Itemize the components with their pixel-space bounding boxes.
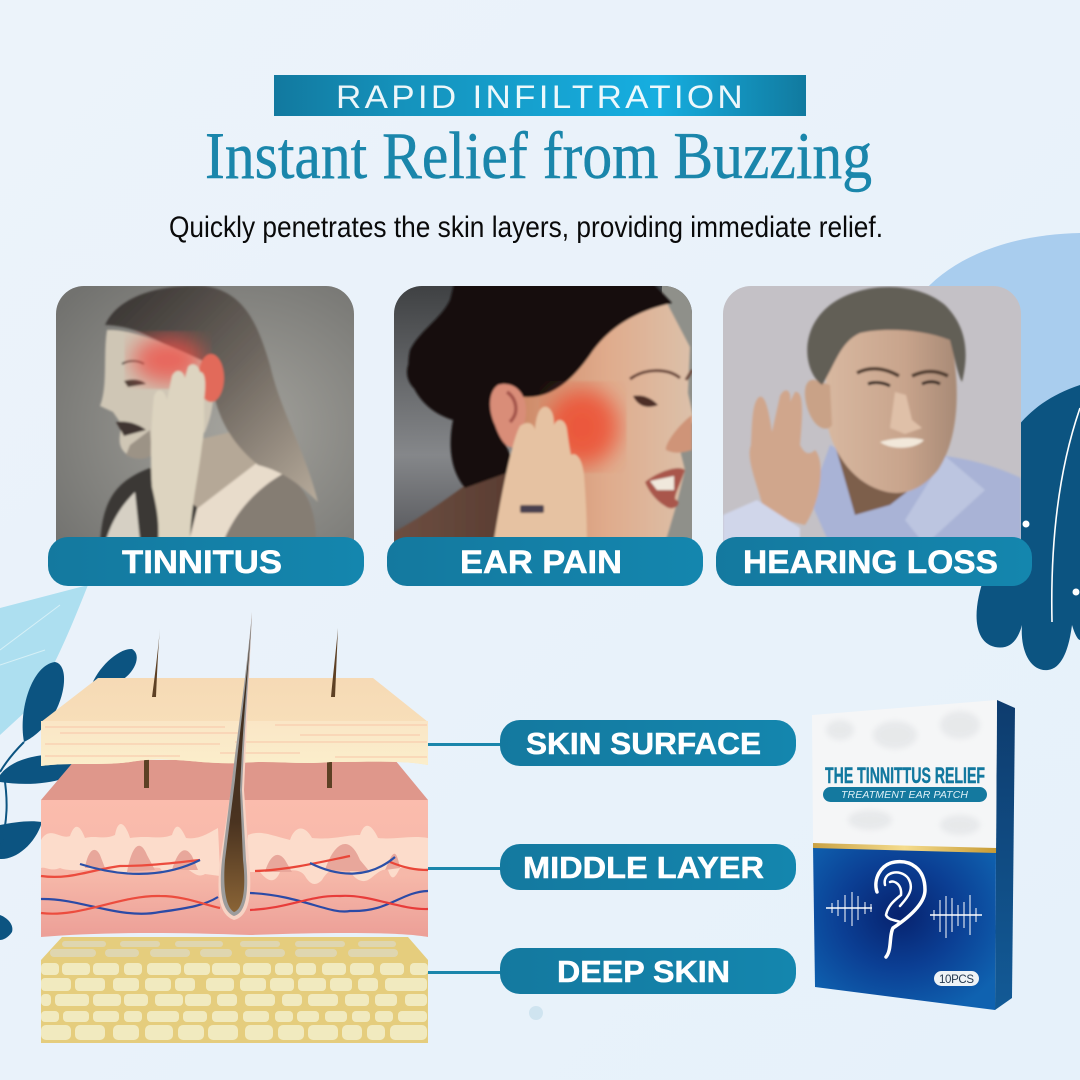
small hairs (152, 628, 338, 697)
photo: man cupping ear (723, 286, 1021, 546)
panel: ear pain (387, 280, 703, 586)
decoration: small dot (529, 1006, 543, 1020)
decoration: light blue blob top right (925, 233, 1080, 440)
box front bottom (813, 846, 996, 1010)
box subtitle pill: TREATMENT EAR PATCH (841, 789, 968, 801)
panel: hearing loss (716, 286, 1032, 586)
label: skin surface (500, 720, 796, 766)
decoration: dark blue leaves left (0, 649, 137, 940)
label pill: ear pain (387, 537, 703, 586)
count badge (934, 971, 979, 986)
label: skin surface: SKIN SURFACE (526, 726, 761, 761)
photo: woman holding ear (56, 286, 354, 546)
label pill: ear pain: EAR PAIN (460, 544, 622, 580)
decoration: pale cyan leaf left (0, 585, 88, 735)
ear icon (876, 862, 925, 957)
label: middle layer: MIDDLE LAYER (523, 850, 764, 885)
hair follicle (218, 612, 252, 920)
box front top (812, 700, 997, 850)
box subtitle pill (823, 787, 987, 802)
count badge: 10PCS (939, 974, 974, 986)
photo: woman with ear pain (394, 280, 694, 546)
label pill: hearing loss (716, 537, 1032, 586)
gold stripe (813, 843, 996, 853)
box title: THE TINNITTUS RELIEF (825, 763, 985, 788)
hair stubs under surface (144, 758, 332, 788)
skin diagram (41, 612, 428, 1043)
panel: tinnitus (48, 286, 364, 586)
product box (812, 700, 1015, 1010)
connector lines (428, 743, 502, 974)
subtitle: Quickly penetrates the skin layers, providing immediate relief. (169, 211, 883, 244)
label pill: hearing loss: HEARING LOSS (743, 544, 998, 580)
deep skin layer (41, 937, 428, 1043)
label pill: tinnitus: TINNITUS (122, 544, 282, 580)
surface layer (41, 678, 428, 766)
title: Instant Relief from Buzzing (205, 119, 872, 193)
sound waves (826, 892, 982, 938)
middle layer (41, 758, 428, 937)
label: deep skin: DEEP SKIN (557, 954, 730, 989)
header band: rapid infiltration (274, 75, 806, 116)
header band: rapid infiltration: RAPID INFILTRATION (336, 79, 746, 115)
label pill: tinnitus (48, 537, 364, 586)
label: middle layer (500, 844, 796, 890)
label: deep skin (500, 948, 796, 994)
box side (995, 700, 1015, 1010)
decoration: dark blue plant right (977, 385, 1080, 670)
